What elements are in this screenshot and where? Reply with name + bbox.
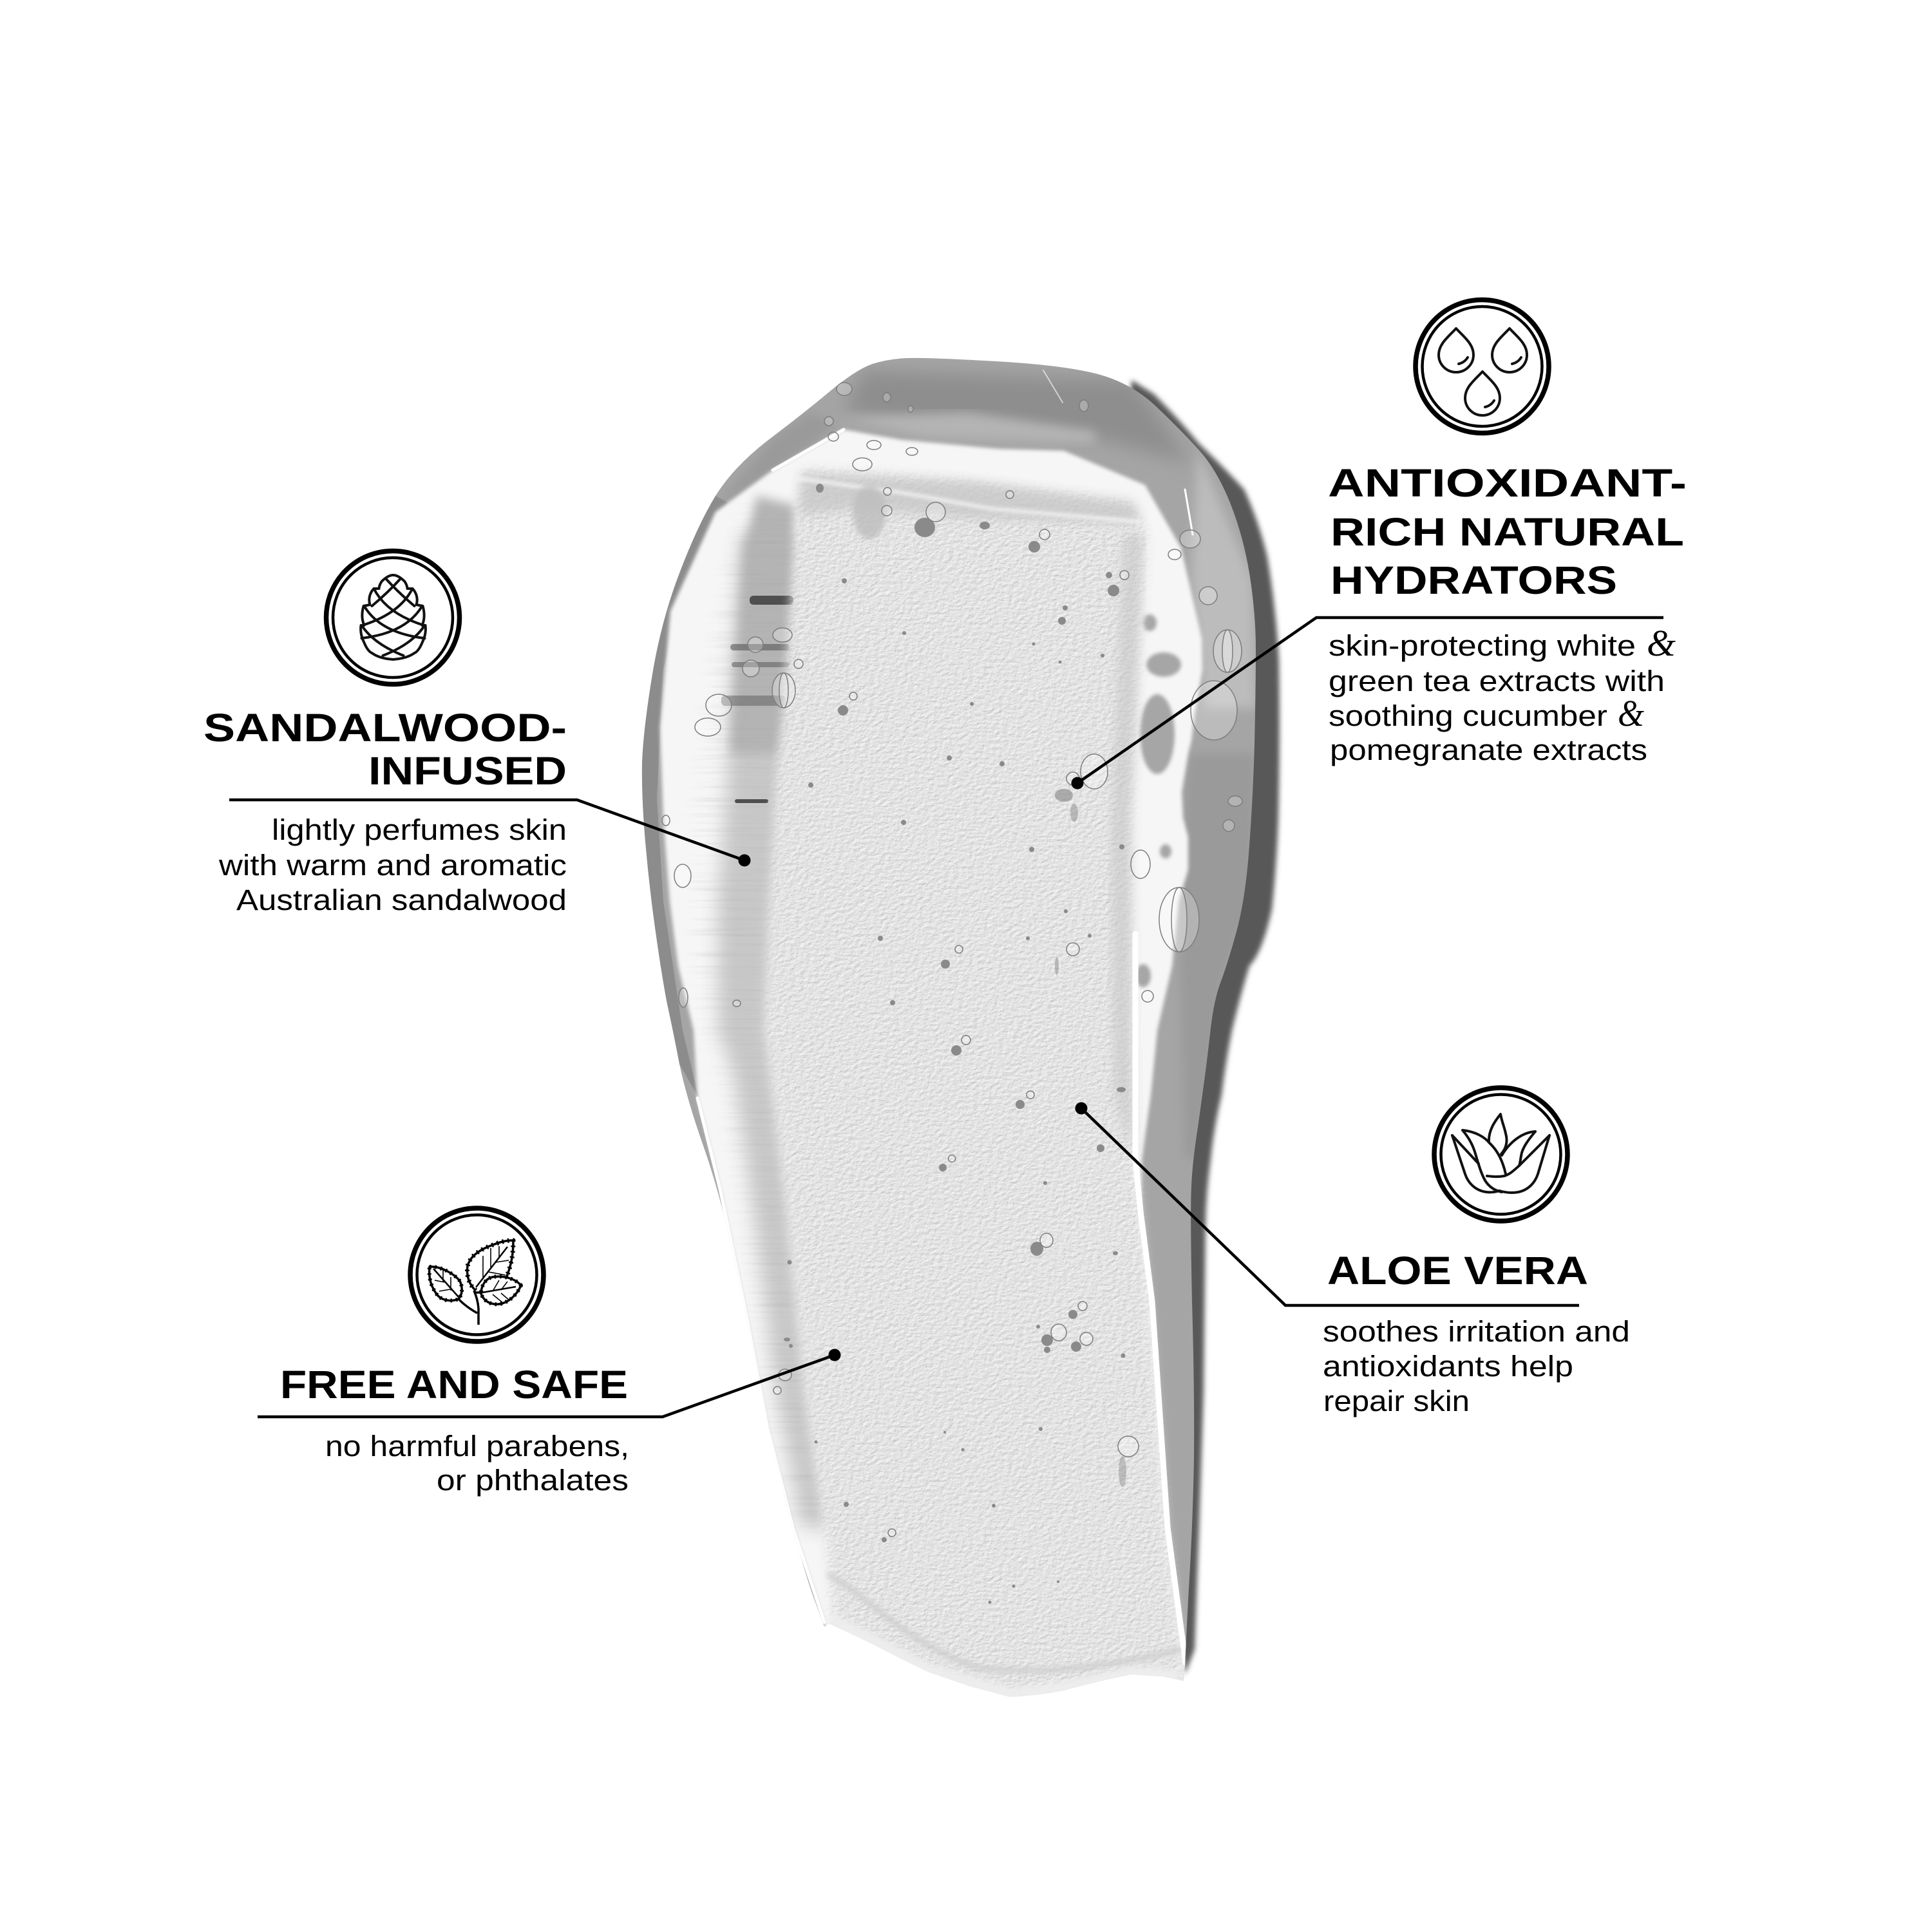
icon: pine cone badge [326,551,460,684]
heading: FREE AND SAFE [280,1363,628,1406]
body text: skin-protecting white [1329,629,1636,662]
leader line [258,1349,841,1417]
callout: free and safe [258,1208,841,1497]
body text: soothes irritation and [1323,1315,1630,1348]
gel swatch [631,348,1280,1713]
heading: RICH NATURAL [1331,510,1684,554]
inner right shade [1111,535,1143,1159]
top dark gel [844,370,1191,464]
icon: water drops badge [1416,300,1549,433]
leader line [1075,1103,1579,1305]
body text [325,1430,629,1497]
body text: lightly perfumes skin [272,813,567,846]
white refraction band [660,430,1202,1700]
white highlight lines [697,370,1193,1663]
icon: leaves badge [410,1208,544,1341]
heading: HYDRATORS [1331,558,1617,602]
dark strip with streaks [731,496,795,753]
heading: INFUSED [368,749,567,793]
gel body [631,348,1275,1713]
body text: or phthalates [437,1464,629,1497]
bubbles [662,383,1242,1537]
bottom edge [828,1575,1184,1671]
heading [1328,461,1687,602]
right grey pools [1135,614,1181,987]
callout: antioxidant hydrators [1072,300,1687,790]
body text: green tea extracts with [1329,665,1665,697]
gel drop shadow [1095,380,1280,1674]
heading: SANDALWOOD- [204,706,567,750]
body text: soothing cucumber [1329,699,1607,732]
heading [204,706,567,793]
right rim tone [1179,753,1256,1159]
heading: ANTIOXIDANT- [1328,461,1687,505]
inner textured layer [760,451,1198,1713]
air specks [784,484,1126,1604]
icon: aloe plant badge [1434,1088,1567,1221]
callout: aloe vera [1075,1088,1630,1417]
leader line [229,800,751,867]
body text: antioxidants help [1323,1350,1573,1383]
callout: sandalwood-infused [204,551,751,916]
body text: repair skin [1323,1385,1470,1417]
body text: pomegranate extracts [1330,734,1647,766]
inner top band [799,473,1141,523]
body text: & [1647,622,1676,664]
body text: Australian sandalwood [236,884,567,916]
heading: ALOE VERA [1327,1249,1588,1293]
body text [218,813,567,916]
body text: with warm and aromatic [218,849,567,882]
body text: & [1618,692,1644,734]
left grey band [718,535,831,1528]
body text [1323,1315,1630,1417]
leader line [1072,618,1663,790]
body text [1329,622,1676,766]
body text: no harmful parabens, [325,1430,629,1463]
left rim [642,496,728,1098]
